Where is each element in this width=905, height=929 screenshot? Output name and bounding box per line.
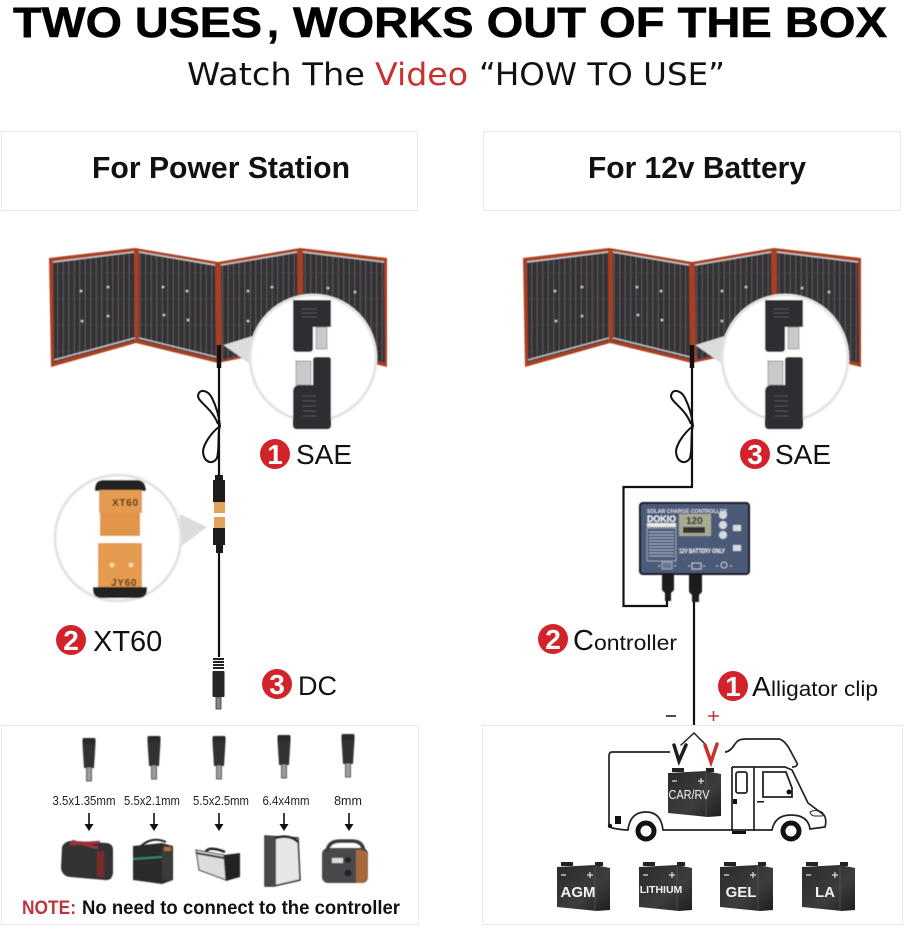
- label: 1 Alligator clip: lligator clip: [771, 678, 878, 701]
- label: 1 Alligator clip: [718, 671, 878, 702]
- panel: for power station heading: For Power Station: [92, 150, 350, 185]
- callout: XT60 connector: XT60: [112, 498, 139, 509]
- alligator clips: [674, 733, 717, 762]
- title: TWO USES: [13, 0, 262, 47]
- callout: XT60 connector: [55, 475, 207, 601]
- icon: power station 3: [196, 849, 240, 881]
- rear wheel: [638, 823, 654, 839]
- label: 1 Alligator clip: A: [752, 671, 771, 702]
- label: 3 DC: [262, 669, 337, 701]
- controller cable: [624, 345, 694, 735]
- DC plug: [212, 659, 224, 709]
- callout: SAE connector: [695, 295, 848, 429]
- solar panel: 12v battery: [523, 248, 861, 367]
- panel: for 12v battery heading: For 12v Battery: [588, 150, 807, 185]
- title: ,: [267, 0, 279, 47]
- title: WORKS OUT OF THE BOX: [293, 0, 887, 47]
- icon: power station 5: [322, 841, 368, 883]
- solar charge controller: [640, 503, 749, 602]
- adapter size labels: 3.5x1.35mm: [52, 794, 116, 808]
- label: 3 SAE: SAE: [775, 439, 831, 470]
- front wheel: [783, 823, 799, 839]
- battery: GEL: GEL: [726, 884, 756, 901]
- panel: for power station heading: [2, 132, 418, 210]
- battery: LITHIUM: [639, 862, 692, 911]
- solar panel: power station: [49, 248, 387, 367]
- title: [13, 0, 887, 47]
- callout: SAE connector: [223, 295, 376, 429]
- panel: vehicle and battery types: [482, 726, 902, 924]
- label: 2 XT60: 2: [63, 625, 79, 656]
- adapter size labels: 8mm: [334, 794, 362, 808]
- label: 3 SAE: [740, 439, 831, 470]
- label: 2 Controller: 2: [545, 624, 561, 655]
- subtitle: Watch The: [187, 57, 365, 93]
- power station cable: [198, 345, 220, 657]
- adapter size labels: 5.5x2.1mm: [124, 794, 180, 808]
- polarity marks: [666, 711, 719, 721]
- subtitle: [187, 57, 725, 93]
- icon: adapter plugs: [82, 734, 354, 781]
- label: 3 DC: DC: [298, 671, 337, 701]
- battery: CAR/RV: [668, 768, 721, 817]
- arrows: [84, 813, 354, 831]
- panel: DC adapters and power stations: [2, 726, 418, 924]
- adapter size labels: 6.4x4mm: [262, 794, 310, 808]
- motorhome details: [608, 790, 792, 834]
- label: 2 Controller: ontroller: [594, 632, 677, 655]
- label: 3 DC: 3: [269, 669, 285, 700]
- label: 1 SAE: [260, 439, 352, 470]
- note: No need to connect to the controller: [82, 898, 401, 919]
- battery: LA: LA: [815, 884, 835, 901]
- solar charge controller: SOLAR CHARGE CONTROLLER: [647, 509, 727, 515]
- label: 2 Controller: C: [573, 625, 594, 657]
- battery: GEL: [720, 862, 773, 911]
- solar charge controller: 12V BATTERY ONLY: [679, 548, 725, 555]
- label: 1 SAE: 1: [267, 439, 283, 470]
- icon: power station 1: [61, 841, 113, 880]
- battery: CAR/RV: CAR/RV: [668, 787, 710, 802]
- label: 2 Controller: [538, 624, 677, 657]
- battery: AGM: [557, 862, 610, 911]
- label: 2 XT60: [56, 625, 162, 658]
- adapter size labels: [52, 794, 362, 808]
- XT60 inline connector: [213, 475, 225, 553]
- label: 1 SAE: SAE: [296, 439, 352, 470]
- label: 2 XT60: XT60: [93, 626, 162, 658]
- subtitle: “HOW TO USE”: [479, 57, 725, 93]
- note: NOTE:: [22, 898, 76, 919]
- icon: power station 4: [265, 836, 300, 886]
- motorhome: [609, 739, 826, 831]
- battery: AGM: AGM: [560, 884, 596, 901]
- panel: for 12v battery heading: [484, 132, 900, 210]
- icon: power station 2: [133, 840, 173, 884]
- callout: XT60 connector: JY60: [111, 578, 137, 589]
- label: 1 Alligator clip: 1: [725, 671, 741, 702]
- battery: LA: [802, 862, 855, 911]
- battery: LITHIUM: LITHIUM: [640, 884, 683, 896]
- subtitle: Video: [375, 57, 468, 93]
- adapter size labels: 5.5x2.5mm: [193, 794, 249, 808]
- solar charge controller: DOKIO: [647, 514, 676, 524]
- label: 3 SAE: 3: [747, 439, 763, 470]
- solar charge controller: 120: [686, 516, 703, 527]
